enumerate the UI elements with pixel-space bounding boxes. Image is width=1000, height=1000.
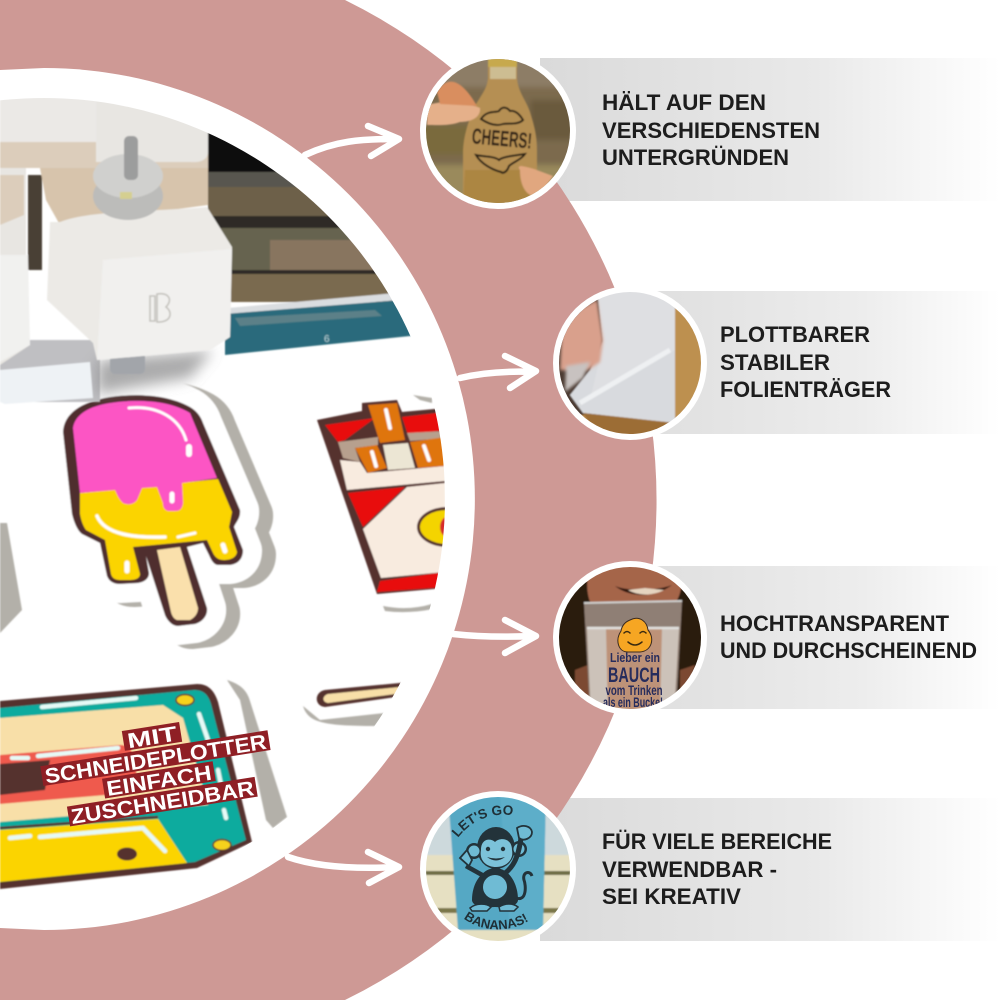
text block 1: VERSCHIEDENSTEN <box>602 118 820 143</box>
cutting plotter machine <box>0 90 428 404</box>
bottle text: Let's go: LET'S GO <box>452 805 513 838</box>
text block 4: SEI KREATIV <box>602 884 741 909</box>
text block 3: UND DURCHSCHEINEND <box>720 638 977 663</box>
arrow 2 <box>460 356 536 388</box>
white main circle ring <box>0 68 475 930</box>
rotated label: Mit Schneideplotter einfach zuschneidbar <box>37 709 278 832</box>
rotated label: Mit Schneideplotter einfach zuschneidbar: EINFACH <box>105 762 213 801</box>
photo circle 3: glass with sticker: Lieber ein <box>610 650 660 665</box>
sticker: lower right stick fragment <box>303 682 410 726</box>
text block 3: HOCHTRANSPARENT <box>720 611 950 636</box>
text block 4 <box>602 829 832 909</box>
main photo: cutting plotter and stickers <box>0 98 445 890</box>
text block 2: PLOTTBARER <box>720 322 870 347</box>
smiley sticker <box>618 618 652 652</box>
text block 3 <box>720 611 977 663</box>
text block 2: FOLIENTRÄGER <box>720 377 891 402</box>
rotated label: Mit Schneideplotter einfach zuschneidbar: MIT <box>126 723 179 753</box>
photo circle 1: bottle with Cheers sticker: CHEERS! <box>471 123 533 154</box>
photo circle 3: glass with sticker: als ein Bucke! <box>603 694 663 710</box>
text block 1: HÄLT AUF DEN <box>602 90 766 115</box>
sticker: grey sliver at left <box>0 523 22 633</box>
photo circle 1: bottle with Cheers sticker <box>420 53 576 210</box>
photo circle 3: glass with sticker: vom Trinken <box>606 682 662 698</box>
sticker: cigarette pack <box>316 394 445 613</box>
photo circle 3: glass with sticker: BAUCH <box>608 664 660 687</box>
monkey <box>460 826 532 911</box>
panel: info bar 3 <box>640 566 1000 709</box>
rotated label: Mit Schneideplotter einfach zuschneidbar: ZUSCHNEIDBAR <box>69 777 256 829</box>
panel: info bar 4 <box>540 798 1000 941</box>
rotated label: Mit Schneideplotter einfach zuschneidbar: SCHNEIDEPLOTTER <box>43 731 268 788</box>
photo circle 4: blue bottle with monkey <box>420 791 576 941</box>
arrow 1 <box>305 126 399 156</box>
panel: info bar 1 <box>540 58 1000 201</box>
text block 4: FÜR VIELE BEREICHE <box>602 829 832 854</box>
text block 1: UNTERGRÜNDEN <box>602 145 789 170</box>
text block 2: STABILER <box>720 350 830 375</box>
hand holding the sheet <box>560 300 603 392</box>
sticker: popsicle <box>63 395 257 630</box>
photo circle 3: glass with sticker <box>553 560 707 715</box>
text block 1 <box>602 90 820 170</box>
cutting plotter machine: 6 <box>324 334 330 345</box>
pink background circle <box>0 0 657 1000</box>
arrow 3 <box>453 620 536 653</box>
photo circle 2: transparent film sheet <box>553 286 707 440</box>
sticker: cassette <box>0 680 287 889</box>
arrow 4 <box>288 852 399 883</box>
text block 2 <box>720 322 891 402</box>
panel: info bar 2 <box>640 291 1000 434</box>
bottle text: Bananas: BANANAS! <box>464 912 528 930</box>
text block 4: VERWENDBAR - <box>602 857 777 882</box>
